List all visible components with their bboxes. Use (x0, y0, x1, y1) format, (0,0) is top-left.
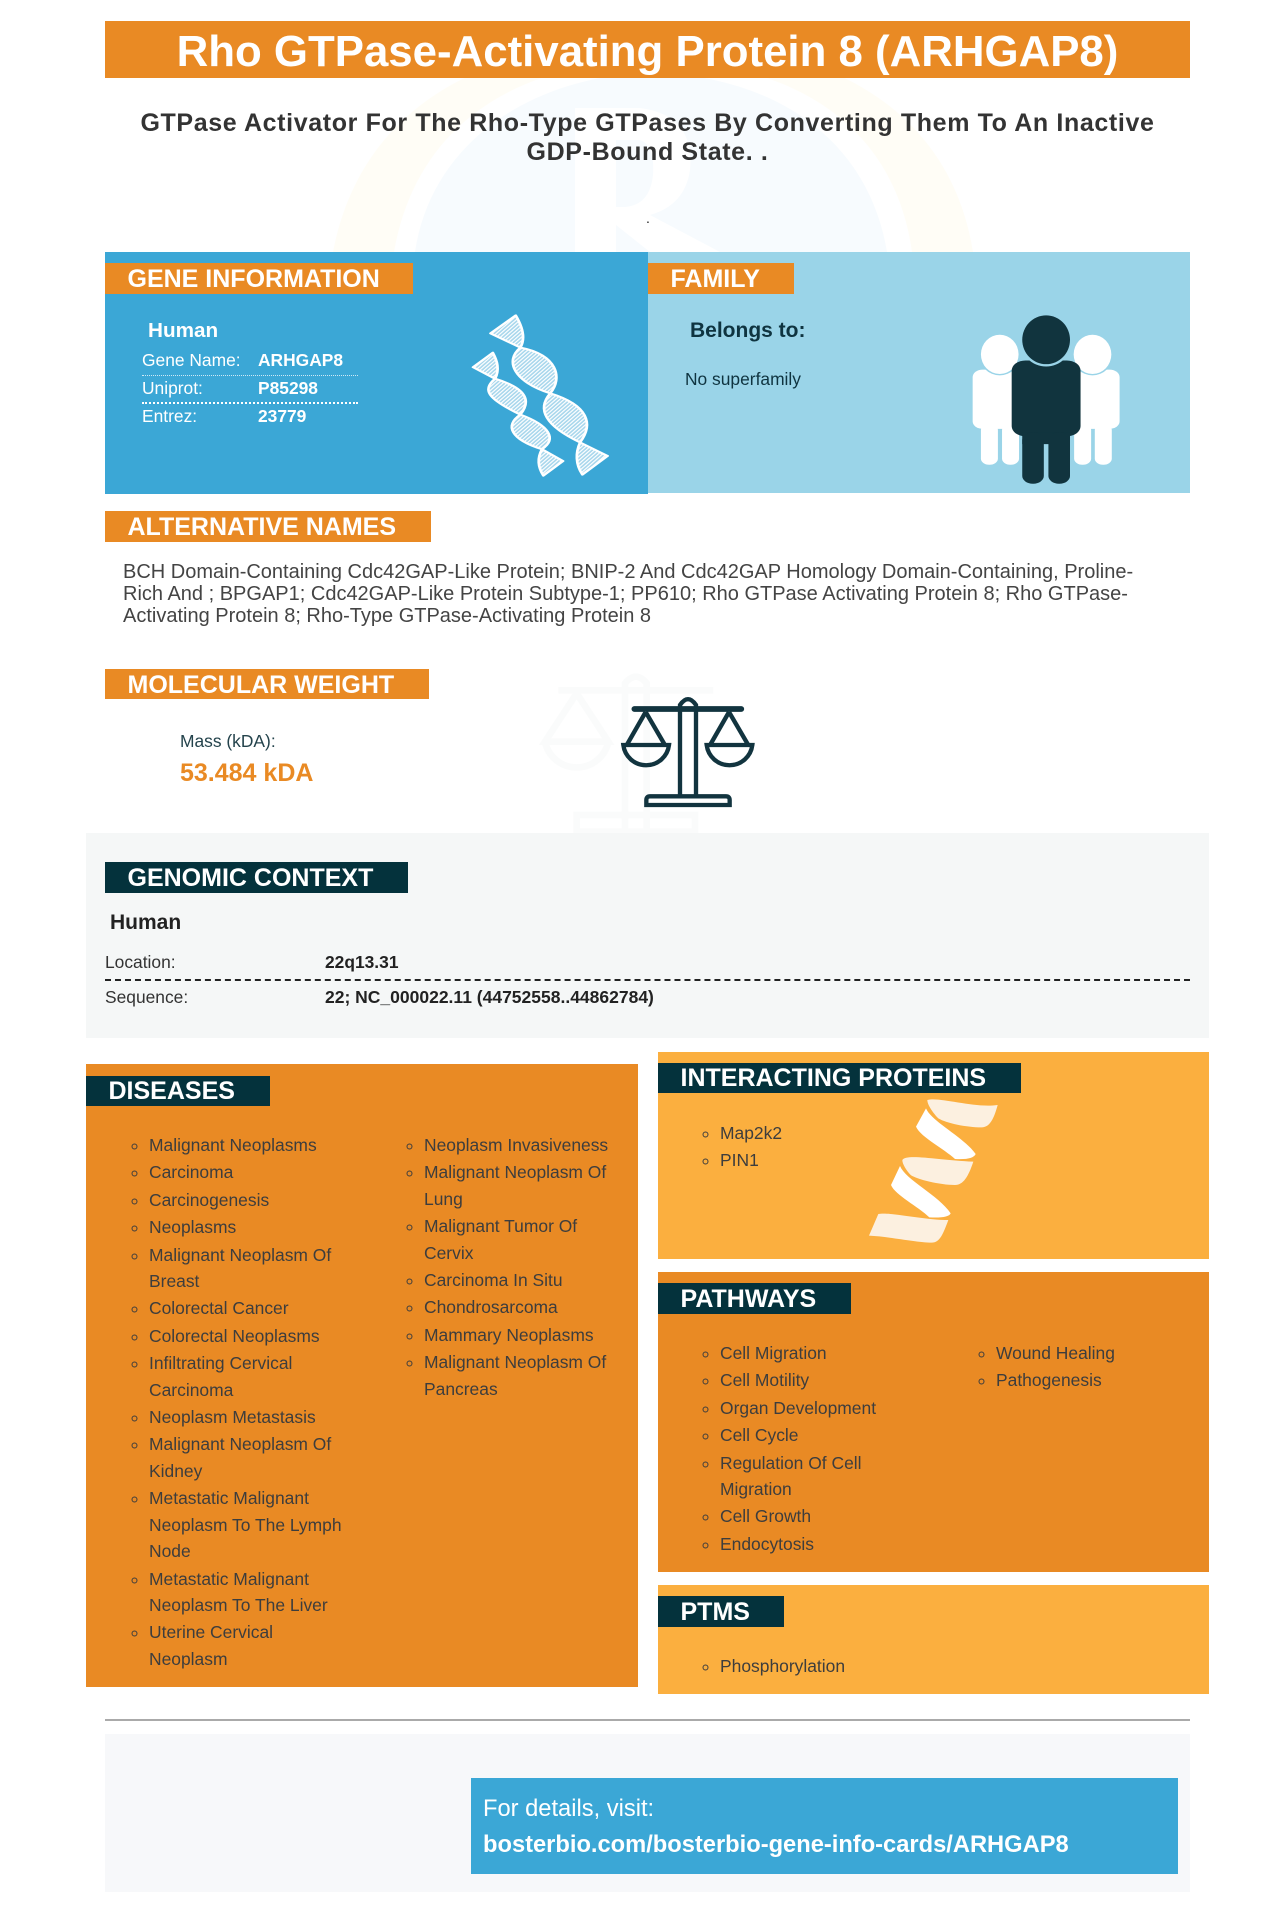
text: alternative names: Rich And ; BPGAP1; Cdc42GAP-Like Protein Subtype-1; PP610; Rho GTPase Activating Protein 8; Rho GTPase- (123, 583, 1128, 605)
disease list column 1: Colorectal Neoplasms (149, 1326, 320, 1346)
species label: Human (110, 911, 181, 934)
text: alternative names: BCH Domain-Containing Cdc42GAP-Like Protein; BNIP-2 And Cdc42GAP Homology Domain-Containing, Proline- (123, 561, 1133, 583)
pathway list column 1: Cell Motility (720, 1370, 809, 1390)
heading: diseases (86, 1076, 270, 1106)
panel: interacting proteins (658, 1052, 1209, 1259)
heading: family (648, 263, 794, 294)
heading: molecular weight: MOLECULAR WEIGHT (128, 671, 394, 699)
disease list column 1: Malignant Neoplasms (149, 1135, 317, 1155)
disease list column 1: Metastatic Malignant (149, 1488, 309, 1508)
subtitle: GDP-Bound State. . (527, 138, 768, 166)
disease list column 2: Malignant Neoplasm Of (424, 1352, 606, 1372)
pathway list column 1: Organ Development (720, 1398, 876, 1418)
heading: pathways: PATHWAYS (680, 1285, 816, 1313)
icon: family people (972, 315, 1120, 484)
protein list: Map2k2 (720, 1123, 782, 1143)
disease list column 2: Pancreas (424, 1379, 498, 1399)
disease list column 1: Uterine Cervical (149, 1622, 273, 1642)
heading: gene information: GENE INFORMATION (128, 265, 380, 293)
disease list column 1: Colorectal Cancer (149, 1298, 289, 1318)
panel: footer (105, 1734, 1190, 1892)
disease list column 1: Node (149, 1541, 191, 1561)
disease list column 2: Malignant Tumor Of (424, 1216, 577, 1236)
footer divider (105, 1719, 1190, 1721)
callout url: bosterbio.com/bosterbio-gene-info-cards/ARHGAP8 (483, 1832, 1069, 1858)
gene name row: Gene Name: (142, 350, 241, 370)
pathway list column 2: Wound Healing (996, 1343, 1115, 1363)
disease list column 1: Infiltrating Cervical (149, 1353, 292, 1373)
entrez row: 23779 (258, 406, 306, 426)
disease list column 1: Carcinoma (149, 1380, 233, 1400)
disease list column 1: Carcinoma (149, 1162, 233, 1182)
pathway list column 2: Pathogenesis (996, 1370, 1102, 1390)
panel: ptms (658, 1585, 1209, 1694)
title banner: Rho GTPase-Activating Protein 8 (ARHGAP8) (177, 27, 1118, 76)
icon: dna helix (472, 314, 609, 477)
panel: gene information (105, 252, 648, 494)
heading: ptms (658, 1596, 784, 1627)
sequence row: 22; NC_000022.11 (44752558..44862784) (325, 987, 654, 1007)
disease list column 1: Neoplasm Metastasis (149, 1407, 316, 1427)
subtitle: GTPase Activator For The Rho-Type GTPases By Converting Them To An Inactive (140, 109, 1155, 137)
ptm list: Phosphorylation (720, 1656, 845, 1676)
location row (105, 950, 1190, 981)
pathway list column 1: Migration (720, 1479, 792, 1499)
disease list column 1 (132, 1135, 342, 1669)
pathway list column 1: Cell Cycle (720, 1425, 798, 1445)
superfamily value: No superfamily (685, 369, 801, 389)
heading: diseases: DISEASES (108, 1077, 235, 1105)
heading: family: FAMILY (670, 265, 760, 293)
panel: diseases (86, 1064, 638, 1687)
uniprot row: Uniprot: (142, 378, 203, 398)
uniprot row: P85298 (258, 378, 318, 398)
icon: balance scale (620, 697, 755, 808)
mass value: 53.484 kDA (180, 759, 313, 787)
pathway list column 1: Regulation Of Cell (720, 1453, 862, 1473)
disease list column 2: Mammary Neoplasms (424, 1325, 594, 1345)
text: alternative names: Activating Protein 8; Rho-Type GTPase-Activating Protein 8 (123, 605, 651, 627)
pathway list column 2 (978, 1343, 1115, 1390)
heading: interacting proteins: INTERACTING PROTEINS (680, 1064, 986, 1092)
panel: pathways (658, 1272, 1209, 1572)
disease list column 1: Kidney (149, 1461, 202, 1481)
panel: family (648, 252, 1190, 493)
heading: pathways (658, 1283, 851, 1314)
pathway list column 1: Cell Migration (720, 1343, 827, 1363)
uniprot row (142, 376, 358, 404)
stray dot: . (646, 210, 650, 226)
gene name row: ARHGAP8 (258, 350, 343, 370)
disease list column 1: Neoplasm To The Lymph (149, 1515, 342, 1535)
disease list column 1: Malignant Neoplasm Of (149, 1434, 331, 1454)
pathway list column 1: Endocytosis (720, 1534, 814, 1554)
disease list column 1: Neoplasms (149, 1217, 236, 1237)
entrez row: Entrez: (142, 406, 197, 426)
disease list column 2 (406, 1135, 608, 1399)
sequence row: Sequence: (105, 987, 188, 1007)
heading: ptms: PTMS (680, 1598, 750, 1626)
callout: details link (471, 1778, 1178, 1874)
disease list column 2: Malignant Neoplasm Of (424, 1162, 606, 1182)
pathway list column 1: Cell Growth (720, 1506, 811, 1526)
disease list column 1: Malignant Neoplasm Of (149, 1245, 331, 1265)
heading: genomic context: GENOMIC CONTEXT (128, 864, 373, 892)
callout label: For details, visit: (483, 1796, 654, 1822)
disease list column 2: Neoplasm Invasiveness (424, 1135, 608, 1155)
species label: Human (148, 319, 218, 342)
protein list: PIN1 (720, 1150, 759, 1170)
disease list column 1: Neoplasm To The Liver (149, 1595, 328, 1615)
protein list (702, 1123, 782, 1170)
gene name row (142, 348, 358, 376)
disease list column 2: Chondrosarcoma (424, 1297, 558, 1317)
mass label: Mass (kDA): (180, 731, 276, 751)
disease list column 1: Carcinogenesis (149, 1190, 269, 1210)
disease list column 1: Breast (149, 1271, 199, 1291)
location row: Location: (105, 952, 176, 972)
disease list column 1: Neoplasm (149, 1649, 228, 1669)
heading: alternative names: ALTERNATIVE NAMES (128, 513, 396, 541)
disease list column 1: Metastatic Malignant (149, 1568, 309, 1588)
panel: genomic context (86, 833, 1209, 1038)
belongs to label: Belongs to: (690, 319, 806, 342)
subtitle (140, 109, 1155, 166)
disease list column 2: Carcinoma In Situ (424, 1270, 563, 1290)
disease list column 2: Cervix (424, 1243, 473, 1263)
background watermark logo (333, 78, 973, 252)
disease list column 2: Lung (424, 1189, 463, 1209)
icon: protein ribbon (869, 1099, 998, 1243)
pathway list column 1 (702, 1343, 876, 1554)
text: alternative names (123, 561, 1133, 627)
location row: 22q13.31 (325, 952, 398, 972)
entrez row (142, 406, 306, 426)
sequence row (105, 987, 654, 1007)
